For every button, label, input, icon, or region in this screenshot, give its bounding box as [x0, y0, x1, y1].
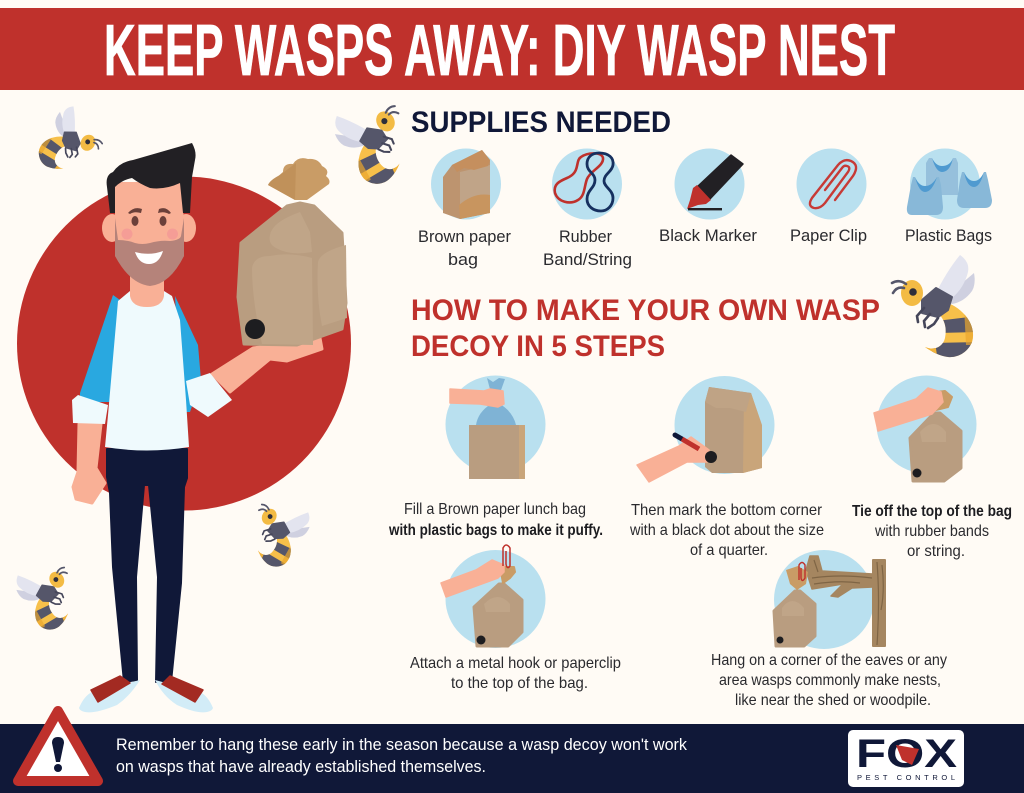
tied bag: [910, 391, 961, 481]
caption: with rubber bands: [874, 523, 989, 540]
label: Paper Clip: [790, 226, 867, 245]
wooden post and branch: [806, 556, 886, 647]
label: bag: [448, 250, 478, 269]
Fox Pest Control logo: FOX: [856, 732, 957, 776]
wasp lower left: [7, 552, 91, 640]
caption: area wasps commonly make nests,: [719, 672, 941, 689]
caption: [629, 502, 824, 559]
cheeks: [122, 228, 178, 240]
hand: [874, 388, 943, 431]
blue sleeves: [80, 295, 201, 412]
wasp beside steps heading: [892, 255, 980, 362]
paper bag: [469, 425, 525, 479]
supply: rubber band / string: [543, 148, 632, 269]
Fox Pest Control logo: PEST CONTROL: [857, 773, 955, 782]
hanging bag: [774, 566, 815, 646]
caption: Attach a metal hook or paperclip: [410, 655, 621, 672]
caption: [711, 652, 947, 709]
warning triangle icon: [18, 711, 98, 781]
step 3: tie off the bag: [852, 376, 1012, 560]
caption: like near the shed or woodpile.: [735, 692, 931, 709]
left arm and hand: [73, 424, 105, 503]
step 1: fill the bag: [388, 376, 603, 539]
beard: [115, 218, 184, 286]
right arm and hand: [212, 338, 322, 392]
label: Band/String: [543, 250, 632, 269]
label: Plastic Bags: [905, 226, 992, 245]
person holding decoy bag: [72, 143, 347, 712]
red circle behind person: [17, 176, 351, 510]
hand: [450, 389, 504, 407]
ears: [102, 214, 196, 242]
caption: [388, 501, 603, 539]
step 5: hang on a branch: [711, 550, 947, 709]
caption: Hang on a corner of the eaves or any: [711, 652, 947, 669]
warning text: on wasps that have already established themselves.: [116, 757, 486, 776]
label: Rubber: [559, 227, 612, 246]
caption: [852, 503, 1012, 560]
hand and marker: [637, 435, 717, 482]
trousers: [107, 449, 187, 682]
heading: how to make your own wasp decoy: HOW TO MAKE YOUR OWN WASP: [411, 294, 880, 327]
caption: [410, 655, 621, 692]
white shirt: [105, 291, 189, 450]
caption: of a quarter.: [690, 542, 768, 559]
cuffs: [72, 373, 232, 424]
supply: plastic bags: [905, 148, 992, 245]
wasp lower middle: [235, 489, 319, 577]
hand: [441, 560, 504, 597]
Fox Pest Control logo: [848, 730, 964, 787]
caption: with plastic bags to make it puffy.: [388, 522, 603, 539]
warning text: [116, 735, 687, 776]
heading: supplies needed: SUPPLIES NEEDED: [411, 106, 671, 139]
wasp beside supplies heading: [323, 87, 428, 197]
warning text: Remember to hang these early in the season because a wasp decoy won't work: [116, 735, 687, 754]
heading: how to make your own wasp decoy: [411, 294, 880, 363]
shoes: [79, 676, 213, 712]
label: [543, 227, 632, 269]
supply: brown paper bag: [418, 148, 511, 269]
label: Black Marker: [659, 226, 757, 245]
title banner: [0, 8, 1024, 91]
heading: how to make your own wasp decoy: DECOY IN 5 STEPS: [411, 330, 665, 363]
caption: or string.: [907, 543, 965, 560]
plastic bag: [476, 378, 516, 425]
smile: [135, 251, 163, 264]
supply: paper clip: [790, 148, 867, 245]
black dot: [245, 319, 265, 339]
tied bag: [474, 567, 522, 646]
label: Brown paper: [418, 227, 511, 246]
eyes: [128, 208, 171, 226]
face: [115, 182, 184, 286]
step 2: mark the corner: [629, 376, 824, 559]
wasp top left: [28, 100, 111, 187]
caption: Then mark the bottom corner: [631, 502, 823, 519]
caption: to the top of the bag.: [451, 675, 588, 692]
caption: with a black dot about the size: [629, 522, 824, 539]
supply: black marker: [659, 148, 757, 245]
label: [418, 227, 511, 269]
hair: [107, 143, 196, 213]
decoy bag: [238, 158, 347, 345]
neck: [130, 270, 164, 307]
step 4: attach a clip: [410, 545, 621, 692]
paper clip: [503, 545, 510, 568]
paper clip: [799, 562, 805, 580]
caption: Fill a Brown paper lunch bag: [404, 501, 586, 518]
bag knot: [268, 158, 330, 200]
footer band: [0, 711, 1024, 793]
paper bag: [705, 387, 762, 473]
